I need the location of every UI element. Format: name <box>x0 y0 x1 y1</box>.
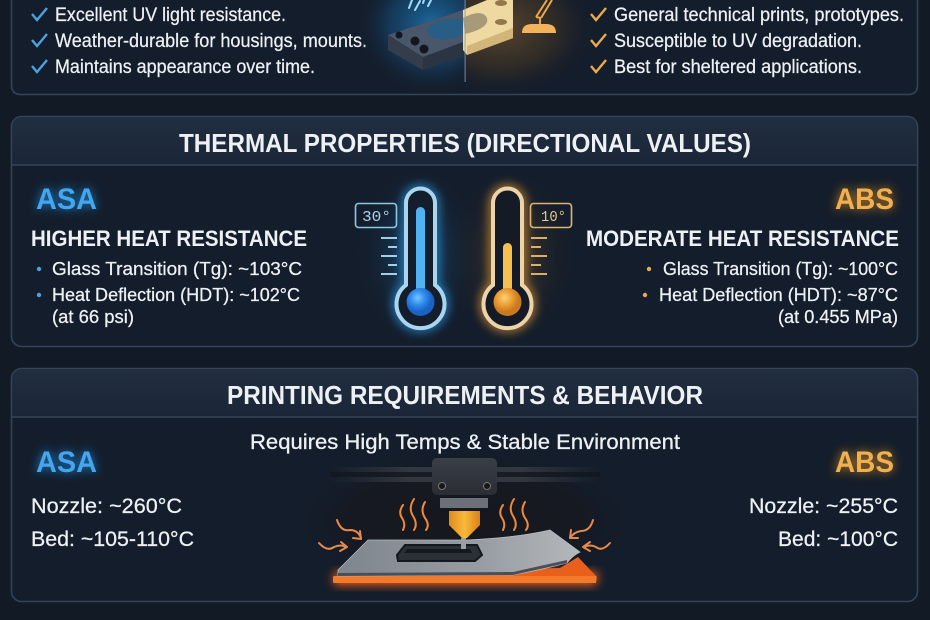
print head <box>432 458 497 549</box>
ABS thermal column: MODERATE HEAT RESISTANCE <box>586 226 899 251</box>
ABS UV limitations list: General technical prints, prototypes. <box>614 5 904 26</box>
ABS thermal column <box>586 183 899 327</box>
ABS UV limitations list <box>591 5 904 78</box>
ABS print settings: ABS <box>835 446 894 479</box>
ABS thermal column: ABS <box>835 183 894 216</box>
ASA UV benefits list: Weather-durable for housings, mounts. <box>55 31 367 52</box>
ASA print settings: ASA <box>36 446 97 479</box>
ABS UV limitations list: Best for sheltered applications. <box>614 57 862 78</box>
ASA UV benefits list <box>32 5 367 78</box>
ABS UV limitations list: Susceptible to UV degradation. <box>614 31 862 52</box>
illustration: 3D printer with warping part <box>295 450 635 594</box>
ABS thermal column: Heat Deflection (HDT): ~87°C <box>659 285 898 305</box>
icon: rain <box>409 0 431 10</box>
heated bed <box>333 557 598 585</box>
icon: ASA thermometer <box>352 164 484 346</box>
ASA print settings <box>31 446 194 551</box>
ASA thermal column: Heat Deflection (HDT): ~102°C <box>52 285 300 305</box>
ABS print settings <box>749 446 898 551</box>
ASA UV benefits list: Excellent UV light resistance. <box>55 5 286 26</box>
ASA thermal column <box>31 183 307 327</box>
panel: printing requirements <box>12 368 918 602</box>
ABS print settings: Bed: ~100°C <box>778 528 898 551</box>
heading: thermal properties: THERMAL PROPERTIES (DIRECTIONAL VALUES) <box>179 128 751 158</box>
ASA print settings: ASA <box>36 446 97 479</box>
icon: ASA thermometer: 30° <box>362 209 391 226</box>
ASA thermal column: (at 66 psi) <box>52 307 134 327</box>
icon: ABS thermometer: 10° <box>541 209 566 226</box>
ABS thermal column: (at 0.455 MPa) <box>778 307 898 327</box>
heading: printing requirements: PRINTING REQUIREMENTS & BEHAVIOR <box>227 380 703 410</box>
ASA UV benefits list: Maintains appearance over time. <box>55 57 315 78</box>
ASA thermal column: ASA <box>36 183 97 216</box>
ASA print settings: Nozzle: ~260°C <box>31 495 182 518</box>
ASA thermal column: Glass Transition (Tg): ~103°C <box>52 259 302 279</box>
ABS thermal column: Glass Transition (Tg): ~100°C <box>663 259 898 279</box>
heat waves <box>400 499 528 530</box>
ASA thermal column: ASA <box>36 183 97 216</box>
ASA print settings: Bed: ~105-110°C <box>31 528 194 551</box>
ASA thermal column: HIGHER HEAT RESISTANCE <box>31 226 307 251</box>
warped print plate <box>338 530 580 576</box>
illustration: ASA and ABS bracket under UV <box>358 0 575 83</box>
panel: UV resistance <box>12 0 918 98</box>
ABS thermal column: ABS <box>835 183 894 216</box>
ABS print settings: Nozzle: ~255°C <box>749 495 898 518</box>
ABS print settings: ABS <box>835 446 894 479</box>
arrows: drafts onto the plate <box>319 520 610 551</box>
printed part outline <box>397 545 482 561</box>
icon: sun lamp <box>522 0 556 33</box>
panel: thermal properties <box>12 116 918 346</box>
subheading: Requires High Temps & Stable Environment <box>250 431 680 454</box>
icon: ABS thermometer <box>446 164 578 346</box>
